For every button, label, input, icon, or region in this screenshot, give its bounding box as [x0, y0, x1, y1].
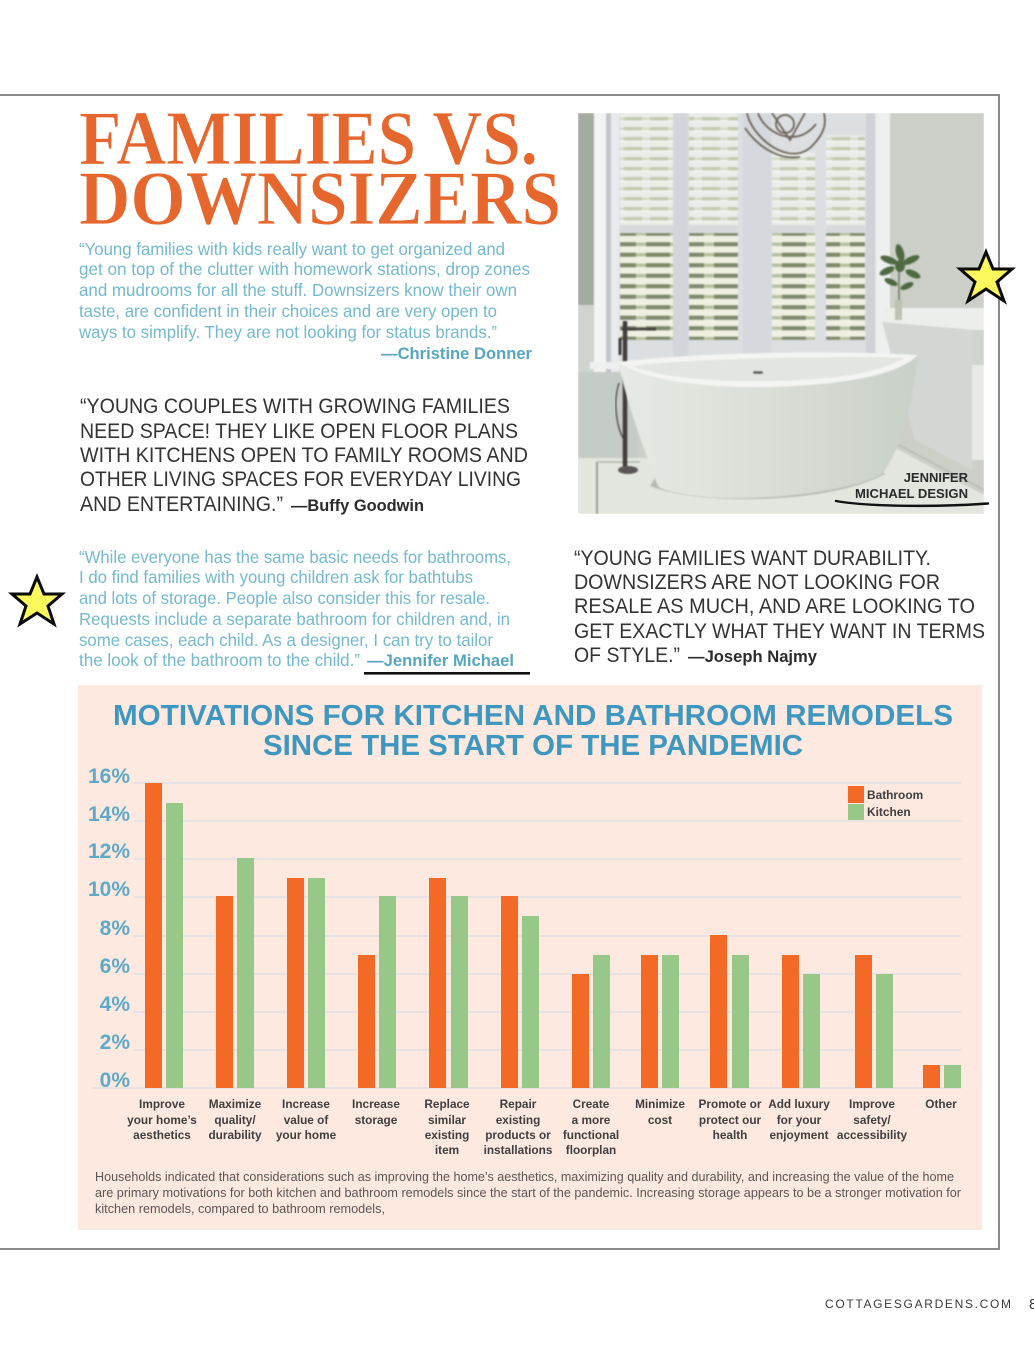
category labels: Increase: [352, 1097, 400, 1111]
category labels: item: [435, 1143, 459, 1157]
quote: Jennifer Michael: and lots of storage. People also consider this for resale.: [79, 588, 490, 608]
category labels: quality/: [214, 1113, 256, 1127]
quote: Christine Donner: get on top of the clutter with homework stations, drop zones: [79, 259, 530, 279]
category labels: aesthetics: [133, 1128, 191, 1142]
chart title: SINCE THE START OF THE PANDEMIC: [263, 730, 803, 762]
category labels: enjoyment: [770, 1128, 829, 1142]
category labels: protect our: [699, 1113, 762, 1127]
quote: Joseph Najmy: DOWNSIZERS ARE NOT LOOKING FOR: [574, 571, 940, 594]
bars: increase value: [287, 878, 325, 1088]
quote: Joseph Najmy: [574, 547, 985, 667]
bars: maximize quality: [216, 858, 254, 1088]
quote: Christine Donner: [78, 239, 532, 363]
y axis labels: 12%: [88, 840, 130, 863]
title: [79, 95, 561, 241]
quote: Buffy Goodwin: NEED SPACE! THEY LIKE OPEN FLOOR PLANS: [80, 420, 518, 443]
quote: Jennifer Michael: [79, 547, 514, 670]
quote: Joseph Najmy: —Joseph Najmy: [688, 648, 818, 666]
category labels: existing: [425, 1128, 469, 1142]
category labels: Other: [925, 1097, 957, 1111]
category labels: safety/: [853, 1113, 891, 1127]
category labels: Replace: [424, 1097, 470, 1111]
quote: Buffy Goodwin: —Buffy Goodwin: [291, 497, 424, 515]
y axis labels: 8%: [100, 917, 130, 940]
category labels: Maximize: [209, 1097, 262, 1111]
photo: white freestanding bathtub below shuttered windows: [578, 113, 984, 514]
bars: minimize cost: [641, 955, 679, 1088]
bars: improve safety: [855, 955, 893, 1088]
category labels: installations: [484, 1143, 553, 1157]
panel: motivations chart: [78, 685, 982, 1230]
title: FAMILIES VS.: [79, 95, 538, 181]
category labels: Create: [573, 1097, 610, 1111]
category labels: health: [713, 1128, 747, 1142]
photo credit: MICHAEL DESIGN: [855, 486, 968, 501]
quote: Joseph Najmy: “YOUNG FAMILIES WANT DURABILITY.: [574, 547, 931, 570]
category labels: floorplan: [566, 1143, 616, 1157]
category labels: your home’s: [127, 1113, 197, 1127]
chart footnote: kitchen remodels, compared to bathroom remodels,: [95, 1202, 385, 1216]
icon: potted plant: [878, 243, 922, 320]
legend: [848, 786, 923, 820]
quote: Christine Donner: ways to simplify. They are not looking for status brands.”: [78, 322, 497, 342]
y axis labels: 10%: [88, 878, 130, 901]
y axis labels: 2%: [100, 1031, 130, 1054]
grid lines: [92, 783, 961, 1088]
quote: Christine Donner: “Young families with kids really want to get organized and: [79, 239, 505, 259]
icon: freestanding tub: [618, 352, 918, 498]
quote: Christine Donner: —Christine Donner: [381, 344, 532, 363]
quote: Buffy Goodwin: OTHER LIVING SPACES FOR EVERYDAY LIVING: [80, 468, 521, 491]
bars: promote health: [710, 935, 749, 1088]
quote: Jennifer Michael: the look of the bathroom to the child.”: [79, 650, 360, 670]
category labels: functional: [563, 1128, 619, 1142]
y axis labels: 14%: [88, 803, 130, 826]
y axis labels: 4%: [100, 993, 130, 1016]
quote: Buffy Goodwin: AND ENTERTAINING.”: [80, 493, 283, 516]
category labels: Promote or: [699, 1097, 762, 1111]
category labels: durability: [208, 1128, 262, 1142]
quote: Jennifer Michael: —Jennifer Michael: [367, 651, 514, 670]
annotation underline: Jennifer Michael: [364, 672, 530, 675]
y axis labels: 0%: [100, 1069, 130, 1092]
photo credit: [856, 473, 968, 498]
quote: Joseph Najmy: OF STYLE.”: [574, 644, 680, 667]
quote: Jennifer Michael: some cases, each child. As a designer, I can try to tailor: [79, 630, 493, 650]
title: DOWNSIZERS: [79, 155, 561, 241]
bars: improve aesthetics: [145, 783, 183, 1088]
quote: Jennifer Michael: Requests include a separate bathroom for children and, in: [79, 609, 510, 629]
bars: repair existing: [501, 896, 539, 1088]
quote: Jennifer Michael: I do find families with young children ask for bathtubs: [79, 567, 473, 587]
chart footnote: Households indicated that considerations such as improving the home’s aesthetics, maximizing quality and durability, and increasing the value of the home: [95, 1170, 954, 1184]
bars: increase storage: [358, 896, 396, 1088]
category labels: a more: [572, 1113, 611, 1127]
category labels: Increase: [282, 1097, 330, 1111]
annotation underline: photo credit: [836, 501, 988, 506]
icon: floor-mounted faucet: [616, 321, 656, 474]
category labels: Improve: [849, 1097, 895, 1111]
bars: other: [923, 1065, 961, 1088]
bars: functional floorplan: [572, 955, 610, 1088]
y axis labels: 16%: [88, 765, 130, 788]
bars: replace similar item: [429, 878, 468, 1088]
y axis labels: 6%: [100, 955, 130, 978]
chart footnote: [95, 1170, 962, 1216]
quote: Buffy Goodwin: [80, 395, 528, 516]
bars: add luxury: [782, 955, 820, 1088]
category labels: for your: [777, 1113, 822, 1127]
icon: star annotation right: [960, 252, 1012, 301]
quote: Jennifer Michael: “While everyone has the same basic needs for bathrooms,: [79, 547, 511, 567]
category labels: accessibility: [837, 1128, 908, 1142]
quote: Christine Donner: and mudrooms for all the stuff. Downsizers know their own: [79, 280, 517, 300]
category labels: value of: [284, 1113, 328, 1127]
category labels: storage: [355, 1113, 398, 1127]
category labels: [127, 1097, 957, 1157]
category labels: Improve: [139, 1097, 185, 1111]
category labels: Minimize: [635, 1097, 685, 1111]
quote: Buffy Goodwin: “YOUNG COUPLES WITH GROWING FAMILIES: [80, 395, 510, 418]
quote: Buffy Goodwin: WITH KITCHENS OPEN TO FAMILY ROOMS AND: [80, 444, 528, 467]
page footer: COTTAGESGARDENS.COM: [825, 1297, 1011, 1311]
category labels: cost: [648, 1113, 672, 1127]
quote: Joseph Najmy: GET EXACTLY WHAT THEY WANT IN TERMS: [574, 620, 985, 643]
photo credit: JENNIFER: [904, 470, 969, 485]
category labels: products or: [485, 1128, 551, 1142]
chart title: [113, 700, 953, 762]
quote: Joseph Najmy: RESALE AS MUCH, AND ARE LOOKING TO: [574, 595, 975, 618]
chart footnote: are primary motivations for both kitchen and bathroom remodels since the start of the pandemic. Increasing storage appears to be a stronger motivation for: [95, 1186, 962, 1200]
legend: Kitchen: [867, 805, 911, 819]
y axis labels: [88, 765, 130, 1092]
chart title: MOTIVATIONS FOR KITCHEN AND BATHROOM REMODELS: [113, 700, 953, 732]
icon: star annotation left: [12, 577, 62, 624]
category labels: your home: [276, 1128, 337, 1142]
legend: Bathroom: [867, 788, 923, 802]
bar chart: [145, 783, 961, 1088]
category labels: similar: [428, 1113, 466, 1127]
icon: chandelier: [745, 113, 825, 158]
category labels: Add luxury: [768, 1097, 830, 1111]
quote: Christine Donner: taste, are confident in their choices and are very open to: [79, 301, 497, 321]
category labels: existing: [496, 1113, 540, 1127]
category labels: Repair: [500, 1097, 537, 1111]
